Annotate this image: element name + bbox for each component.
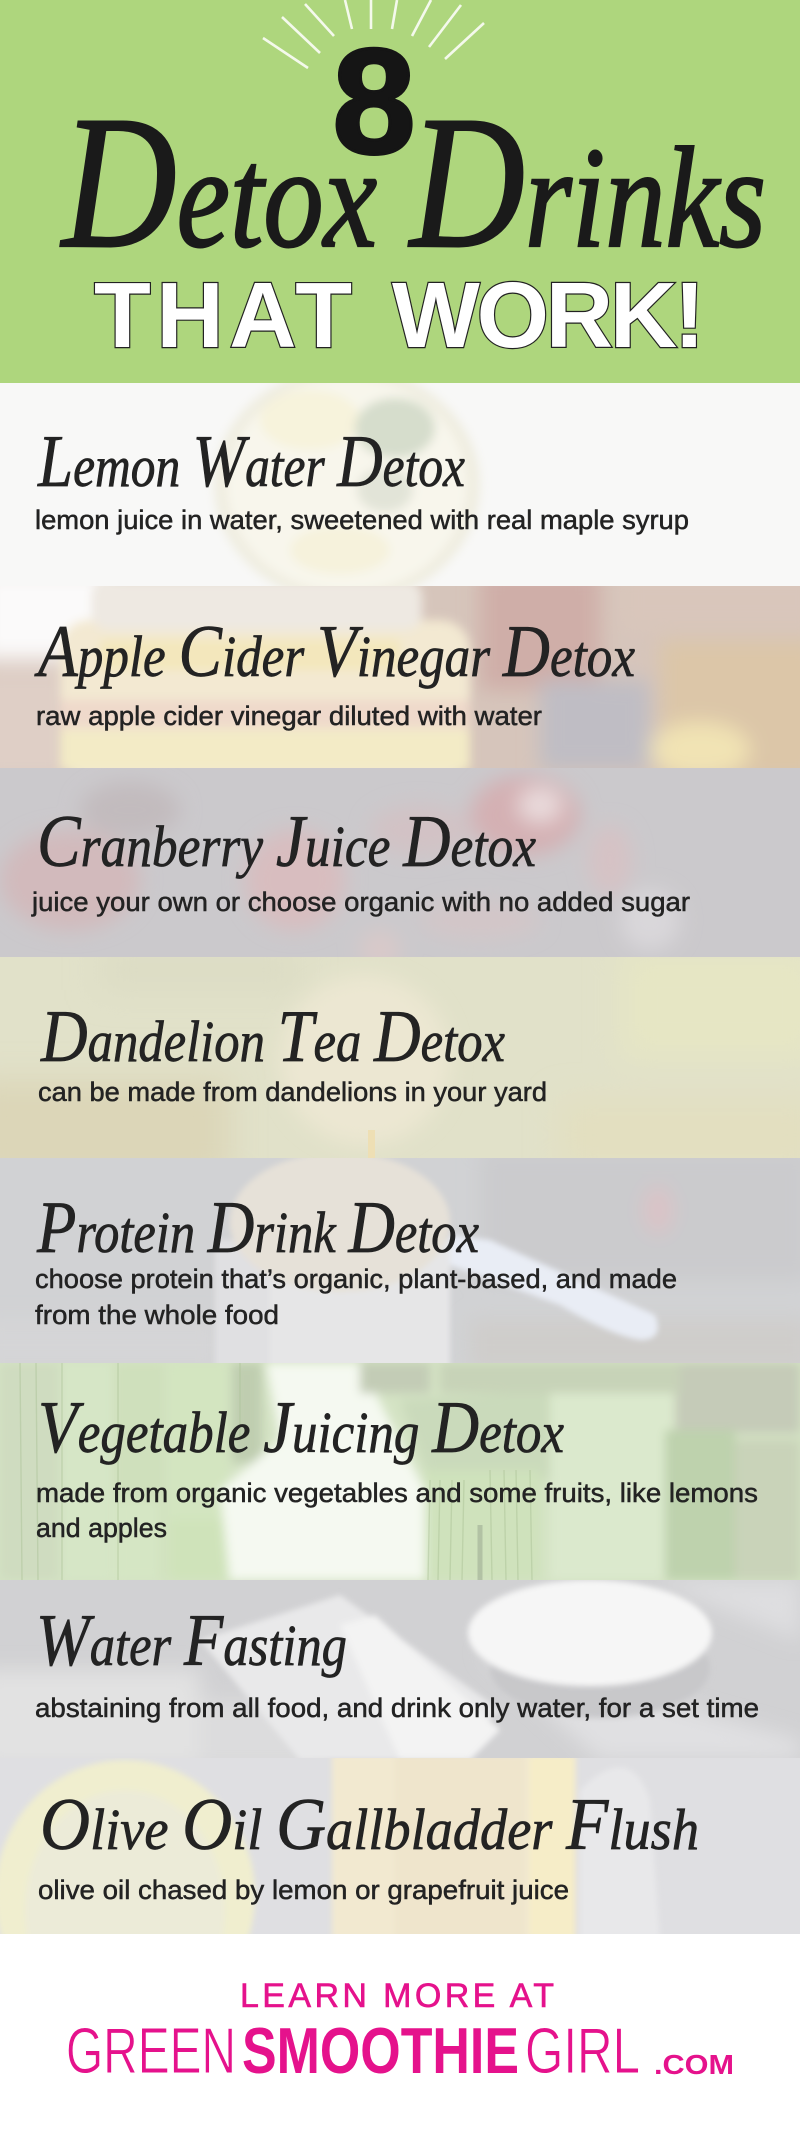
panel: dandelion tea detox xyxy=(0,957,800,1158)
footer: website logo: SMOOTHIE xyxy=(242,2014,519,2087)
heading: Lemon Water Detox xyxy=(37,421,465,503)
description: juice your own or choose organic with no added sugar xyxy=(31,887,690,917)
footer call to action xyxy=(66,1977,734,2087)
photo: dandelion xyxy=(0,957,800,1158)
heading: Protein Drink Detox xyxy=(36,1187,479,1269)
photo: lemon and olive oil bottle xyxy=(0,1758,800,1934)
photo: jar of vinegar xyxy=(0,586,800,768)
header panel xyxy=(0,0,800,383)
footer: website logo: .COM xyxy=(654,2049,734,2080)
title: Detox Drinks xyxy=(59,78,766,288)
footer: learn more: LEARN MORE AT xyxy=(240,1977,554,2015)
title: THAT WORK!: WORK! xyxy=(392,263,705,367)
panel: vegetable juicing detox xyxy=(0,1363,800,1580)
panel: lemon water detox xyxy=(36,383,688,586)
title: number 8: 8 xyxy=(332,17,416,185)
photo: glass of lemon water xyxy=(202,383,492,586)
photo: green vegetables xyxy=(0,1363,800,1580)
panel: olive oil gallbladder flush xyxy=(0,1758,800,1934)
description line 2: and apples xyxy=(36,1513,167,1543)
description: can be made from dandelions in your yard xyxy=(38,1077,547,1107)
heading: Olive Oil Gallbladder Flush xyxy=(40,1784,699,1866)
description: olive oil chased by lemon or grapefruit juice xyxy=(38,1875,569,1905)
heading: Apple Cider Vinegar Detox xyxy=(34,611,635,693)
heading: Cranberry Juice Detox xyxy=(37,801,536,883)
icon: sunburst rays xyxy=(263,0,484,68)
panel: apple cider vinegar detox xyxy=(0,586,800,768)
header background xyxy=(0,0,800,383)
description line 2: from the whole food xyxy=(35,1300,279,1330)
heading: Water Fasting xyxy=(36,1600,347,1682)
heading: Vegetable Juicing Detox xyxy=(38,1387,564,1469)
description: made from organic vegetables and some fruits, like lemons xyxy=(36,1478,758,1508)
description: choose protein that’s organic, plant-based, and made xyxy=(35,1264,677,1294)
title: THAT WORK! xyxy=(94,263,705,367)
photo: cranberries xyxy=(0,768,800,970)
panel: cranberry juice detox xyxy=(0,768,800,970)
title: Detox Drinks: Detox xyxy=(59,78,377,288)
photo: protein powder scoop xyxy=(0,1150,800,1370)
description: raw apple cider vinegar diluted with water xyxy=(36,701,542,731)
footer: website logo: GIRL xyxy=(525,2014,640,2087)
panel: water fasting xyxy=(0,1580,800,1770)
photo: empty plate and cutlery xyxy=(0,1580,800,1770)
panel: protein drink detox xyxy=(0,1150,800,1370)
description: abstaining from all food, and drink only water, for a set time xyxy=(35,1693,759,1723)
heading: Dandelion Tea Detox xyxy=(40,996,505,1078)
footer: website logo: GREEN xyxy=(66,2014,236,2087)
footer: website logo xyxy=(66,2014,734,2087)
description: lemon juice in water, sweetened with real maple syrup xyxy=(35,505,689,535)
title: THAT WORK!: THAT xyxy=(94,263,352,367)
